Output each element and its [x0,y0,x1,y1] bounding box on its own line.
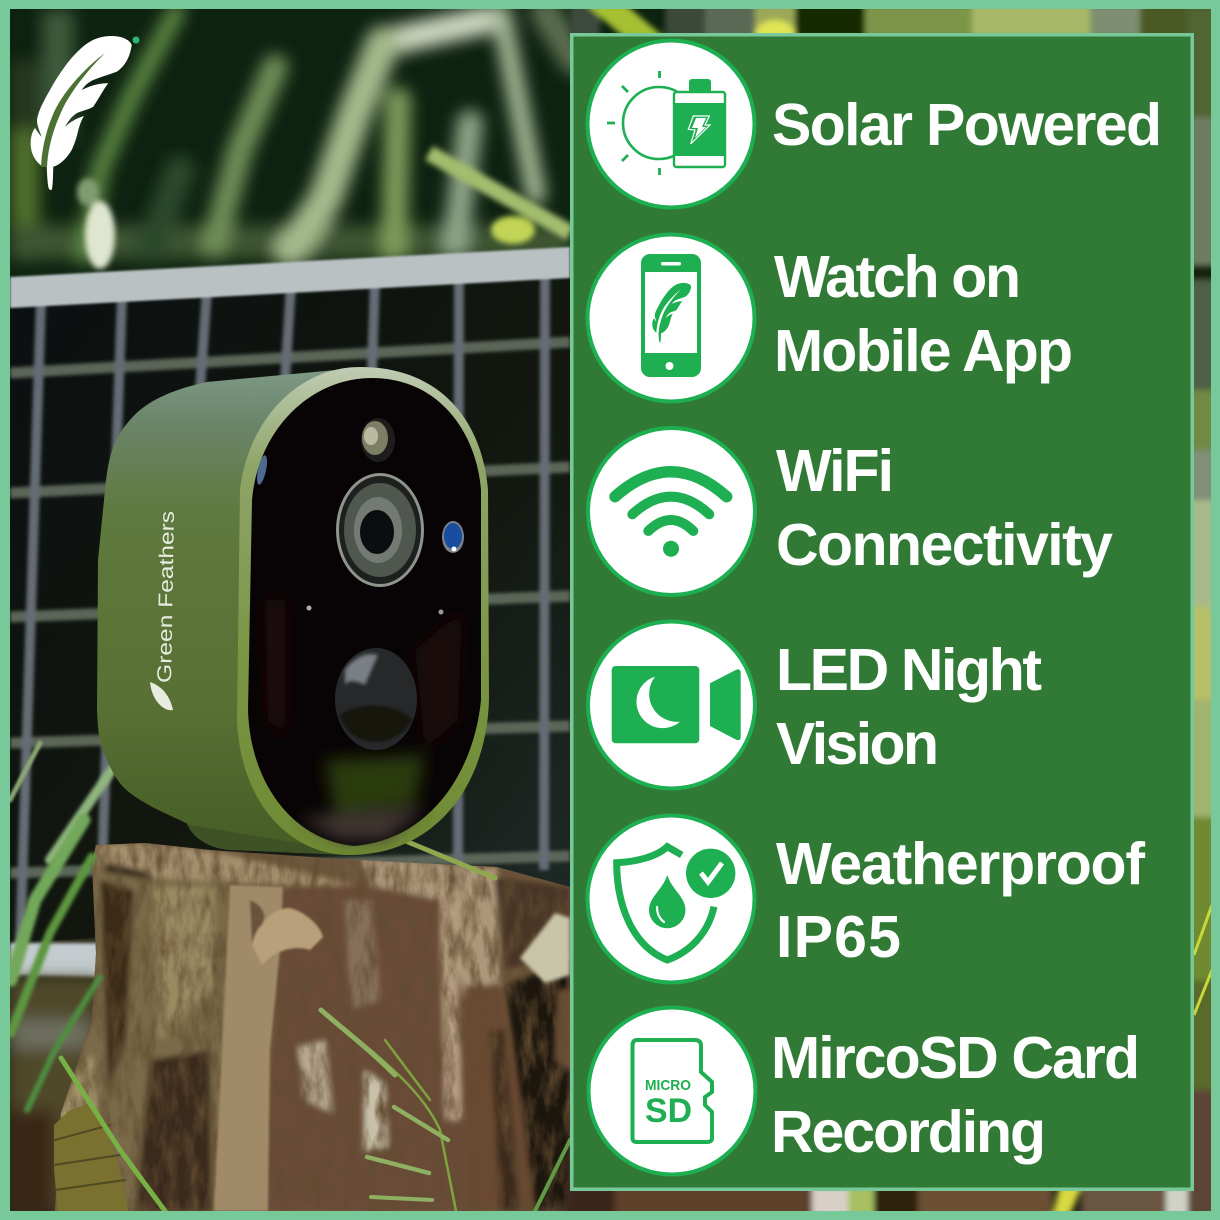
label: WiFi [776,438,894,504]
label: Watch on [774,244,1021,310]
label: Mobile App [774,318,1073,384]
solar panel behind camera [10,247,570,977]
panel horizontal and vertical rails [10,275,570,950]
left section [55,863,230,1211]
label [774,244,1073,384]
feature: weatherproof [588,816,1145,982]
foreground grass blades [10,743,570,1211]
icon: wifi [588,428,755,595]
top and right background strips [565,4,1218,1218]
label: Vision [776,711,939,777]
branch on stump [214,885,323,1211]
panel bottom frame [10,943,100,977]
tree stump [50,835,580,1215]
right section [360,857,500,1000]
camera front bezel [237,367,489,855]
label: Connectivity [776,512,1113,578]
camera brand text: Green Feathers [154,511,179,683]
feature: microSD [588,1008,1140,1174]
camera mount base [184,815,350,855]
label: LED Night [776,637,1042,703]
feature: watch on mobile app [588,234,1073,402]
icon: microSD card: MICRO [645,1077,691,1094]
LED light [361,418,395,462]
feature: solar powered [588,40,1162,208]
feature: wifi [588,428,1113,595]
label [776,438,1113,578]
lens [336,473,424,587]
camera black face [248,378,481,846]
top surface [92,843,356,887]
label [776,831,1145,970]
icon: sun and battery [588,40,754,208]
icon: night camera [588,622,755,788]
face reflections [265,600,462,840]
panel top frame [10,247,570,308]
label: MircoSD Card [771,1025,1140,1091]
camera brand text [150,511,179,710]
icon: microSD card [588,1008,756,1174]
ground left of stump [10,978,100,1215]
seed grass stem [321,1010,456,1211]
middle section [265,880,475,1211]
label: Weatherproof [776,831,1145,897]
label: IP65 [776,904,901,970]
logo: white feather [31,36,140,190]
motion sensor dome [335,648,417,750]
label: Solar Powered [772,92,1162,158]
panel: features [572,35,1192,1189]
camera [97,367,489,855]
icon: shield and drop [588,816,754,982]
label: Recording [771,1099,1046,1165]
lichen on bark [520,913,570,983]
label [771,1025,1140,1165]
camera body [97,368,400,850]
feature: LED night vision [588,622,1042,788]
wood chunk [54,1103,128,1211]
label [776,637,1042,777]
icon: microSD card: SD [645,1092,692,1130]
blue indicator [442,521,464,553]
icon: phone [588,234,754,402]
